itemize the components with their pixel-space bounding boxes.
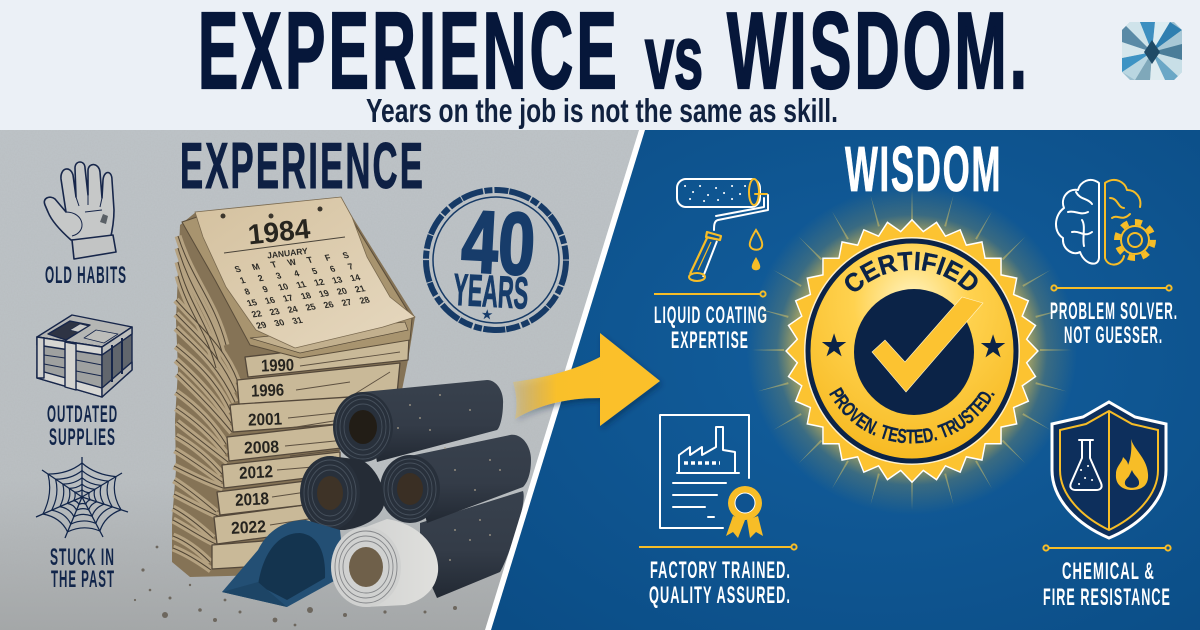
calendar under-sheets [182,208,412,358]
year labels: 2022 [231,517,266,538]
roll: middle left [300,456,384,530]
calendar grid: F [323,252,333,263]
badge rays [752,190,1072,510]
calendar grid: 25 [304,302,317,312]
calendar grid: 19 [317,288,331,299]
calendar grid: 16 [263,295,277,306]
calendar grid: 7 [346,261,355,272]
calendar grid: 6 [328,264,337,274]
calendar grid: 29 [255,320,268,331]
badge serrated edge [787,221,1037,481]
panel: experience: OLD HABITS [45,262,127,289]
heading: wisdom: WISDOM [845,133,1002,205]
calendar stack: 1984 [246,213,312,250]
panel: experience [0,129,660,630]
calendar grid: 4 [292,268,301,279]
calendar grid: 11 [295,279,308,290]
debris on the ground [134,546,457,626]
icon: diamond [1122,22,1182,80]
badge stars: ★ [980,331,1006,362]
label: stuck in the past: STUCK IN [50,544,115,571]
year labels: 2008 [244,437,279,458]
panel: wisdom [485,130,1200,630]
specks [397,394,501,561]
year labels: 2012 [239,462,274,483]
calendar grid: 10 [276,282,290,292]
label: stuck in the past [50,544,115,593]
roll: white [331,519,438,607]
label: outdated supplies: SUPPLIES [49,424,116,451]
title: vs [645,8,703,108]
calendar grid: 30 [273,317,286,328]
year labels: 1996 [251,380,284,401]
calendar grid: 22 [250,309,263,319]
calendar grid: 1 [238,275,247,285]
calendar grid: 14 [348,272,362,283]
calendar grid: 2 [256,273,265,283]
year labels: 2001 [248,409,282,430]
calendar grid: 31 [291,315,304,326]
label: factory trained: QUALITY ASSURED. [649,582,791,609]
panel: experience: OUTDATED [47,401,118,428]
calendar grid: 27 [340,297,353,308]
arrow [513,333,660,426]
year labels: 1990 [261,355,294,376]
calendar grid: S [233,264,243,274]
stamp: 40 years: YEARS [452,264,530,319]
calendar stack [172,197,415,577]
badge check mark [872,297,983,392]
icon: shield flask flame [1052,402,1166,538]
calendar grid: 21 [353,284,367,294]
calendar grid: 20 [335,286,349,297]
label: liquid coating expertise [654,302,768,354]
calendar page 1984 [195,197,415,348]
subtitle: Years on the job is not the same as skill. [366,92,838,129]
calendar grid: 26 [322,299,335,310]
stamp: 40 years: 40 [459,191,537,294]
stamp: 40 years: ★ [481,307,493,322]
page edge stripes [173,236,238,570]
calendar grid: 24 [286,304,299,315]
calendar grid: S [341,250,351,260]
icon: factory certificate [660,415,763,538]
badge stars: ★ [821,330,847,361]
icon: glove [44,162,116,259]
label: liquid coating expertise: LIQUID COATING [654,302,768,329]
icon: crate [37,315,132,397]
calendar grid: W [286,257,298,268]
calendar grid [231,250,376,331]
calendar grid: 3 [274,271,283,281]
icon: paint roller [677,179,768,281]
icon: spider web [36,457,128,538]
badge stars [821,330,1006,362]
calendar grid: 18 [299,290,313,301]
year tabs [212,338,409,569]
label: chemical and fire resistance [1043,558,1171,611]
calendar grid: 9 [261,284,270,294]
icon: brain and gear [1056,180,1153,265]
year labels: 2018 [235,489,270,510]
header band [0,0,1200,130]
stamp: 40 years [422,186,570,334]
roll: top [333,380,503,462]
label: factory trained: FACTORY TRAINED. [650,557,791,584]
calendar grid: M [250,262,261,272]
calendar grid: 13 [330,275,344,285]
roll: middle right [380,435,531,523]
divider: factory trained [639,544,797,550]
year labels [231,355,294,538]
badge text: certified: CERTIFIED [845,252,978,292]
roll: blue sheet [222,520,345,607]
calendar grid: T [305,255,315,265]
roll: lower back dark [420,491,524,598]
calendar grid: 28 [358,295,371,305]
divider: liquid coating [654,291,766,297]
divider: chemical [1043,545,1171,551]
label: factory trained [649,557,791,609]
calendar grid: 17 [281,293,295,304]
membrane rolls [222,380,531,607]
label: problem solver [1050,298,1178,349]
calendar stack: JANUARY [267,246,309,261]
calendar grid: 5 [310,266,319,276]
calendar grid: 12 [312,277,326,288]
icon: certified badge [752,190,1072,510]
label: liquid coating expertise: EXPERTISE [671,327,749,354]
badge text: proven tested trusted: PROVEN. TESTED. TRUSTED. [829,387,995,444]
heading: experience: EXPERIENCE [180,129,425,202]
label: outdated supplies [47,401,118,451]
calendar grid: T [269,259,279,270]
calendar grid: 15 [245,297,259,308]
panel: experience: THE PAST [51,566,115,593]
divider: problem solver [1051,285,1172,291]
calendar grid: 8 [243,286,252,297]
calendar grid: 23 [268,306,281,317]
